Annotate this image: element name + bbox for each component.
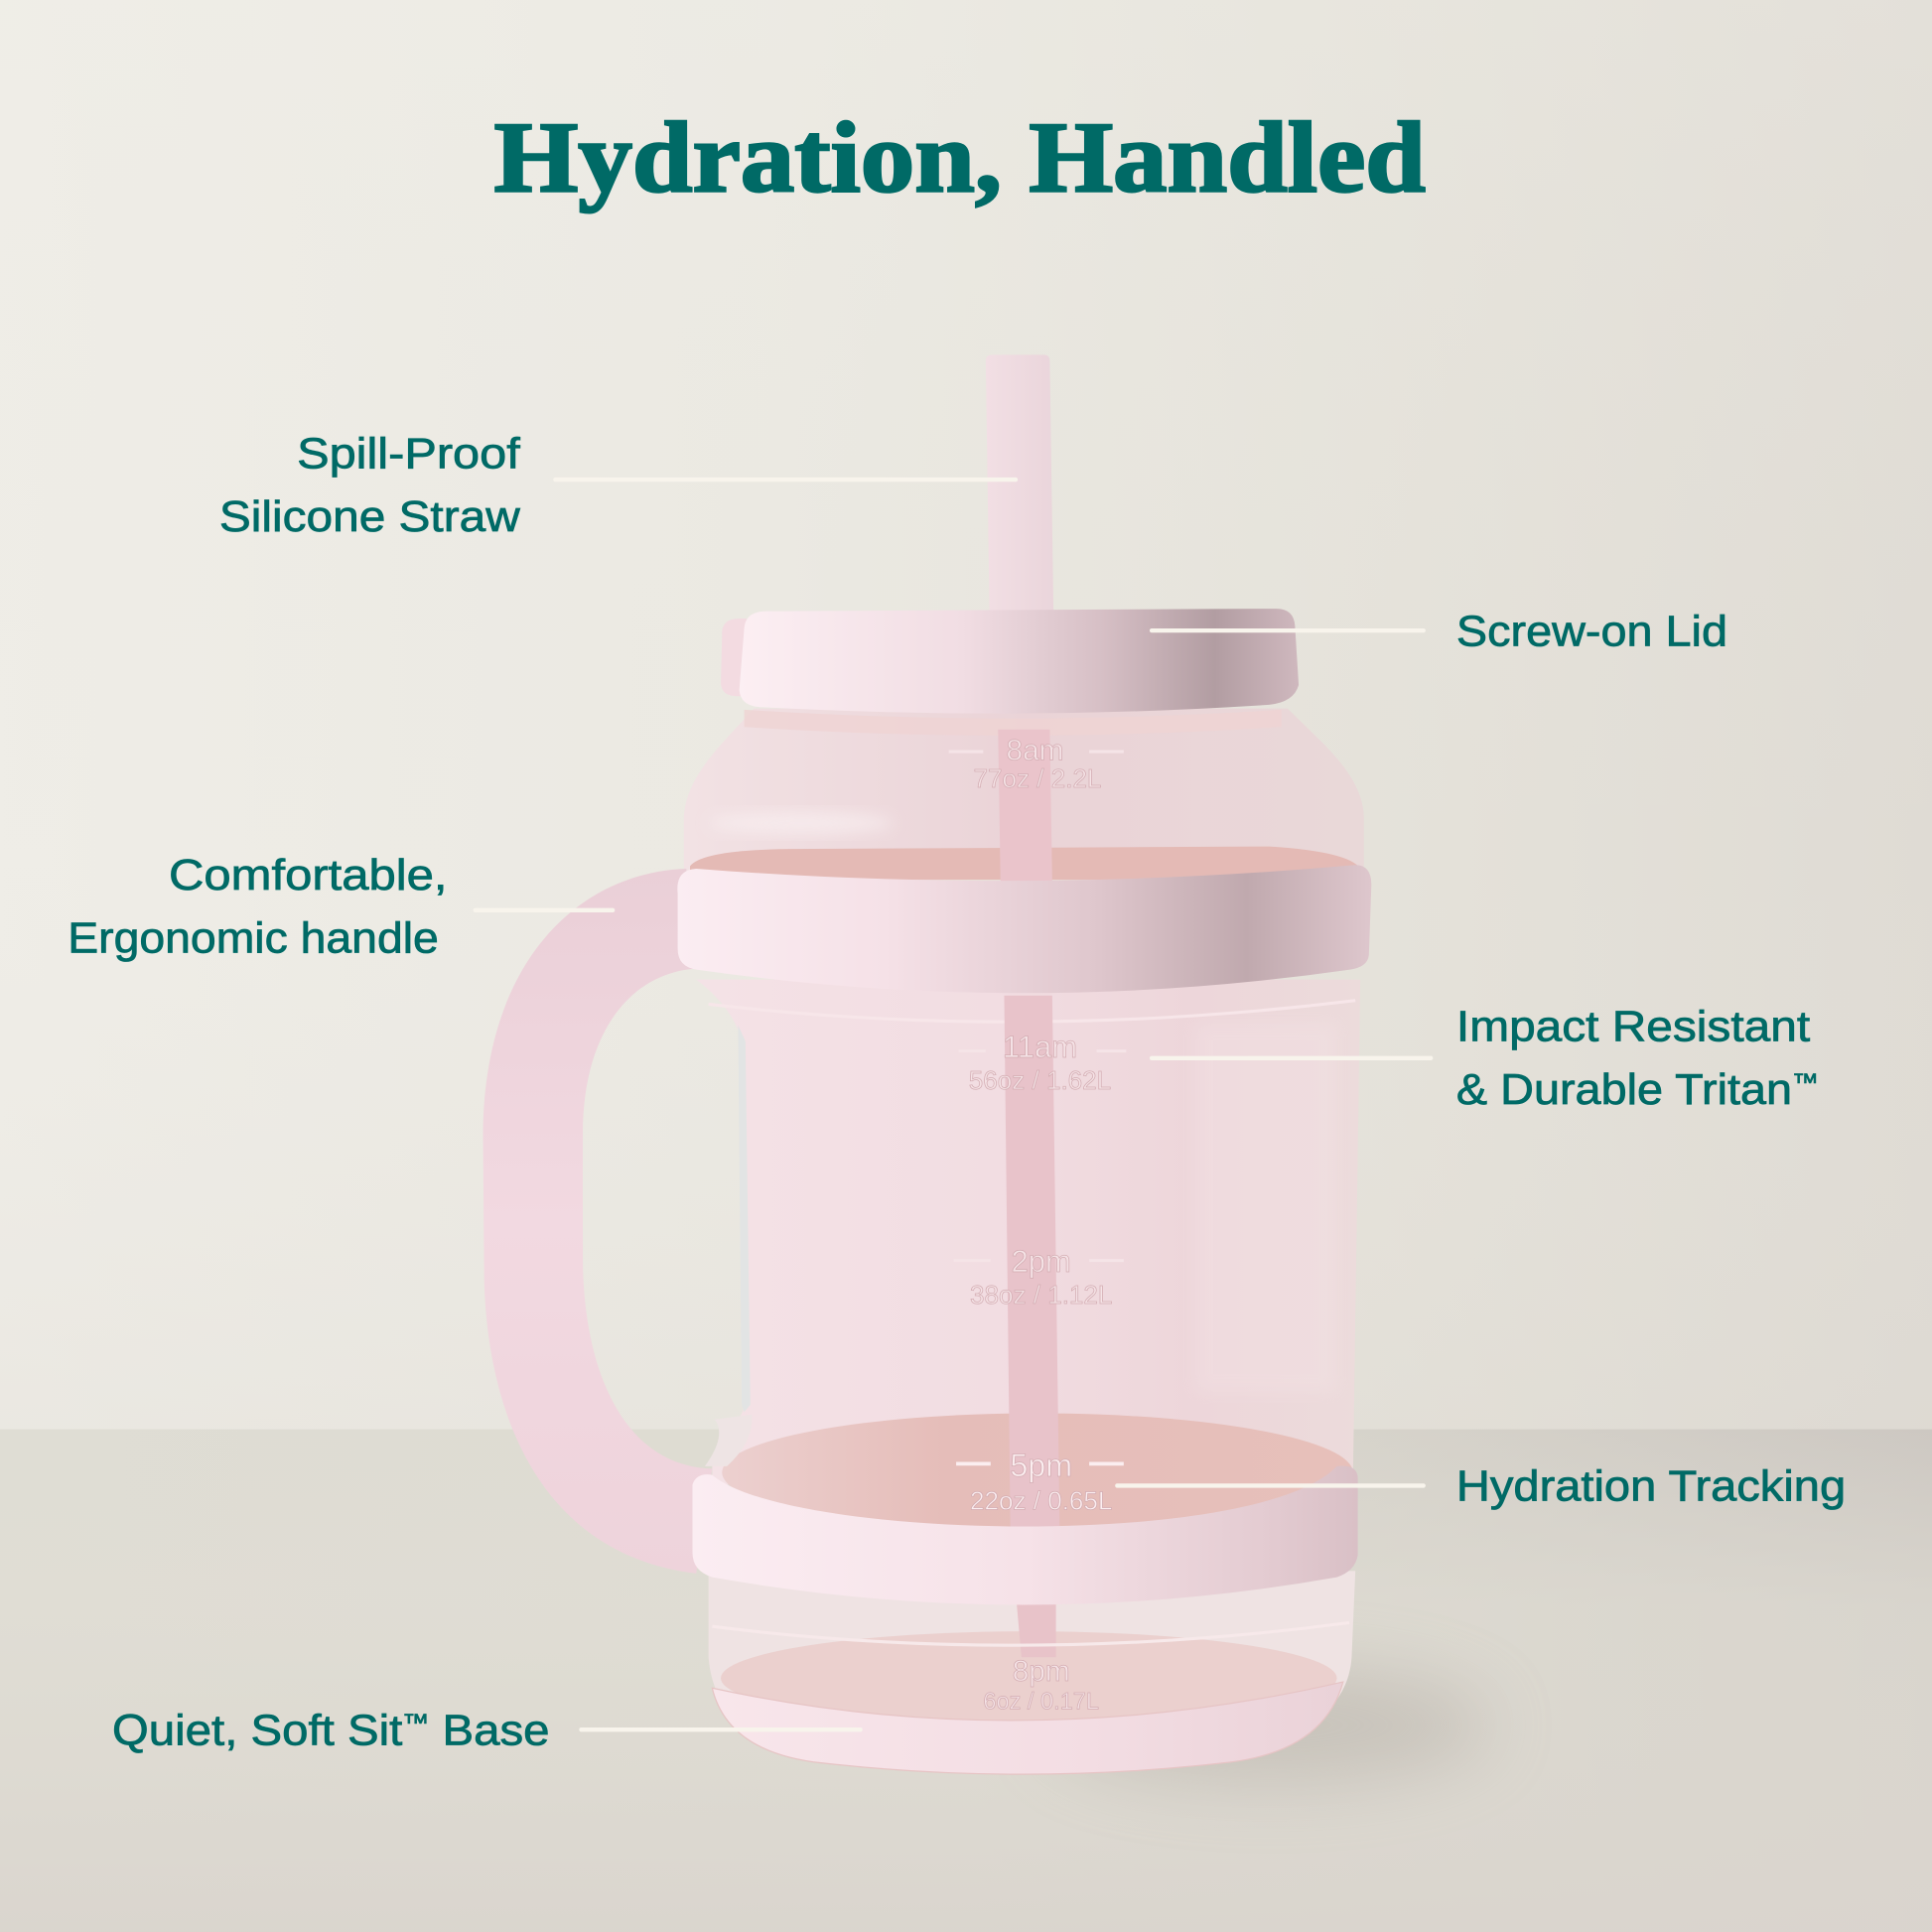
straw inside body	[1004, 996, 1059, 1528]
marking: 8am	[949, 735, 1124, 793]
callout: soft sit base: Base	[429, 1707, 550, 1754]
jug upper shoulder	[684, 709, 1364, 880]
title: Hydration, Handled	[494, 101, 1426, 213]
marking: 5pm: 22oz / 0.65L	[970, 1485, 1112, 1515]
callout: impact resistant Tritan: Impact Resistant	[1456, 1004, 1810, 1051]
callout: ergonomic handle	[68, 852, 615, 962]
callout: ergonomic handle: Comfortable,	[169, 852, 448, 899]
marking: 11am	[959, 1030, 1126, 1095]
callout: impact resistant Tritan	[1150, 1004, 1819, 1114]
marking: 11am: 11am	[1003, 1030, 1077, 1064]
callout: screw-on lid: Screw-on Lid	[1456, 608, 1727, 655]
marking: 8am: 8am	[1007, 735, 1063, 767]
marking: 8pm	[983, 1655, 1099, 1714]
callout: spill-proof straw	[219, 431, 1018, 541]
marking: 11am: 56oz / 1.62L	[969, 1065, 1111, 1095]
marking: 5pm: 5pm	[1010, 1448, 1072, 1483]
callout: impact resistant Tritan: ™	[1792, 1069, 1819, 1096]
callout: ergonomic handle: Ergonomic handle	[68, 914, 439, 962]
straw top section	[986, 354, 1053, 612]
marking: 8pm: 8pm	[1013, 1655, 1070, 1688]
jug lower body	[709, 1571, 1355, 1725]
callout: impact resistant Tritan: & Durable Tritan	[1456, 1066, 1768, 1114]
callout: soft sit base: Quiet, Soft Sit	[112, 1707, 378, 1754]
silicone base	[712, 1682, 1343, 1774]
background wall	[0, 0, 1932, 1432]
straw inside shoulder	[998, 730, 1052, 883]
callout: spill-proof straw: Spill-Proof	[297, 431, 521, 479]
floor shadow	[1047, 1668, 1491, 1782]
marking: 2pm: 2pm	[1012, 1244, 1071, 1279]
callout: hydration tracking	[1115, 1463, 1846, 1511]
marking: 5pm	[956, 1448, 1124, 1515]
product: water jug	[483, 354, 1371, 1774]
marking: 8pm: 6oz / 0.17L	[983, 1688, 1099, 1714]
callout: screw-on lid	[1150, 608, 1727, 655]
callout: hydration tracking: Hydration Tracking	[1456, 1463, 1846, 1511]
marking: 2pm	[954, 1244, 1124, 1310]
handle	[483, 869, 712, 1574]
marking: 8am: 77oz / 2.2L	[974, 763, 1101, 793]
callout: spill-proof straw: Silicone Straw	[219, 493, 520, 541]
marking: 2pm: 38oz / 1.12L	[970, 1280, 1112, 1310]
background table surface	[0, 1430, 1932, 1932]
callout: soft sit base: ™	[402, 1711, 429, 1737]
callout: soft sit base	[112, 1707, 863, 1754]
lower band	[692, 1466, 1358, 1604]
middle band	[677, 865, 1371, 993]
lid	[721, 609, 1299, 714]
jug main body	[696, 980, 1360, 1532]
